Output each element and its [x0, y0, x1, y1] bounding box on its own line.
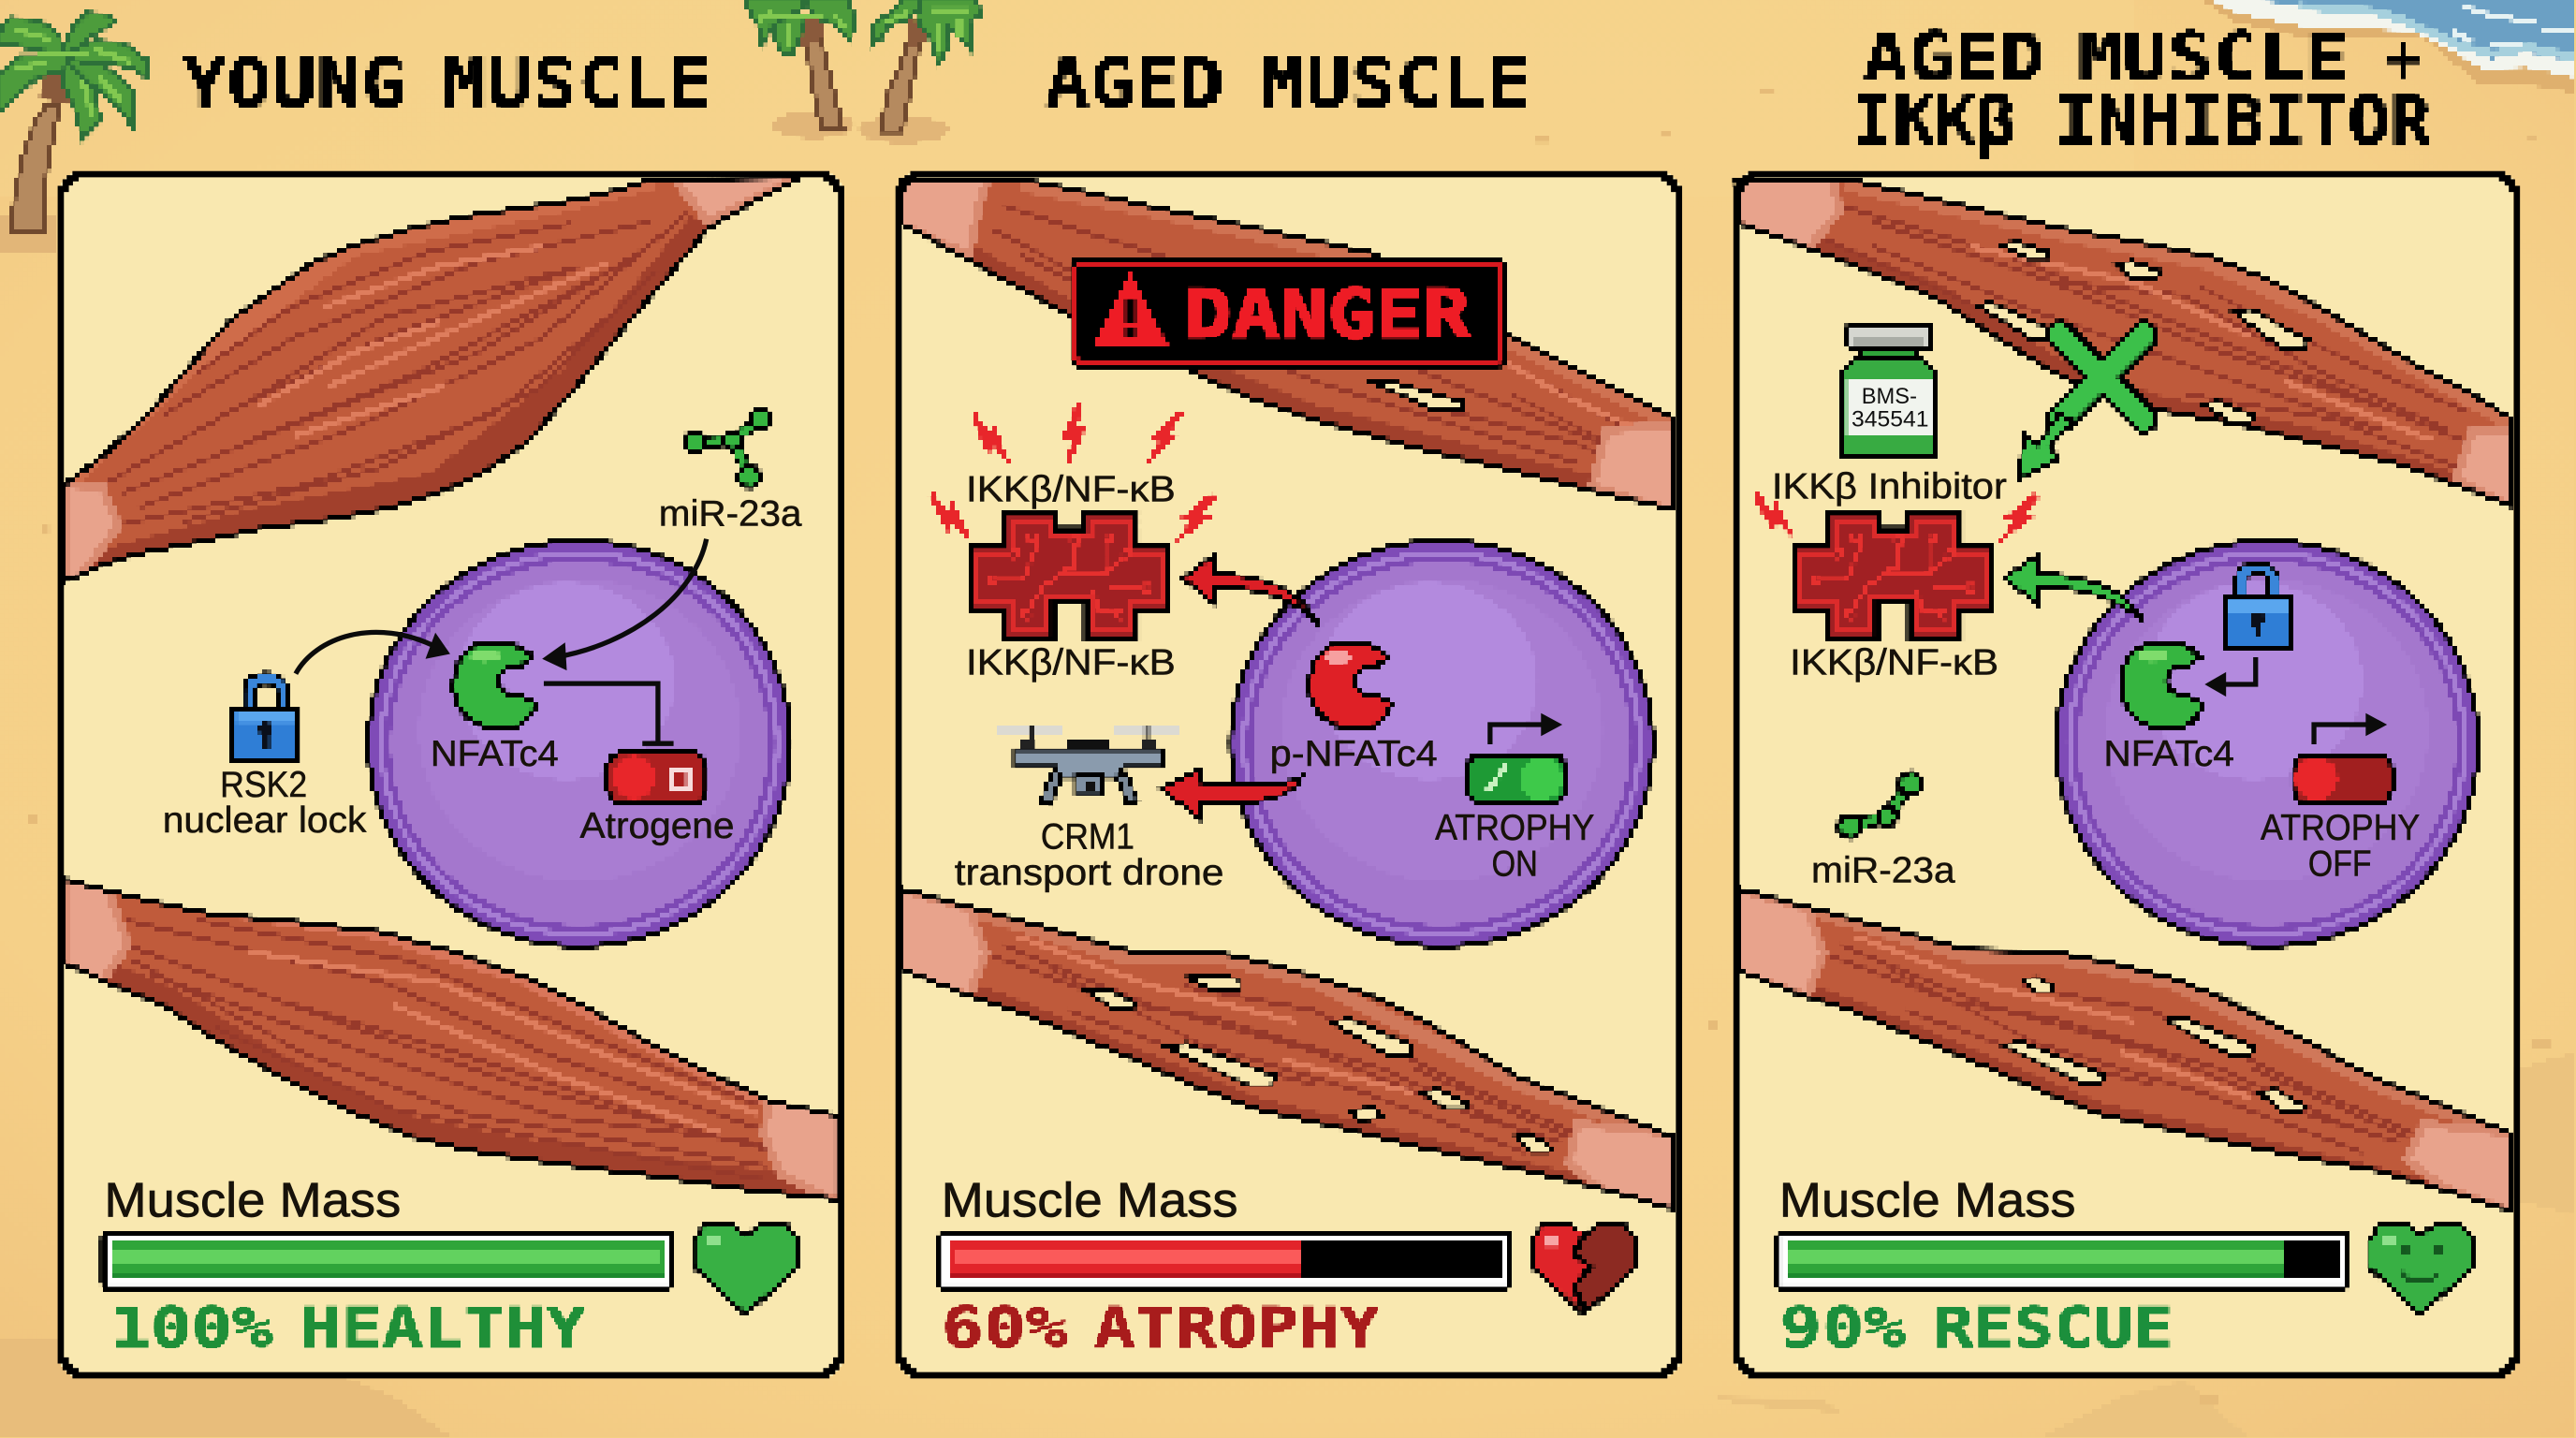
muscle: recovering lower fiber [1736, 889, 2515, 1212]
icon: green NFATc4 enzyme [2121, 642, 2203, 729]
arrow: lock to enzyme [2204, 657, 2256, 697]
arrow: transcription arrow above toggle [1490, 713, 1562, 744]
title: aged muscle + IKKβ inhibitor: AGED [1863, 18, 2044, 96]
label: NFATc4: NFATc4 [2103, 734, 2234, 774]
label: ATROPHY ON [1435, 808, 1594, 884]
label: ATROPHY OFF: ATROPHY [2261, 808, 2420, 848]
status: 60% atrophy: ATROPHY [1094, 1296, 1380, 1360]
panel border [61, 174, 842, 1375]
arrow: to kinase chip [1183, 553, 1319, 624]
arrow: inhibitor arrow [2019, 414, 2073, 479]
muscle: thin upper fiber [897, 174, 1677, 513]
title: young muscle: YOUNG [183, 44, 406, 123]
label: nuclear lock: nuclear lock [163, 800, 367, 841]
status bar: muscle mass 100% [103, 1232, 673, 1289]
label: bottle BMS-345541 [1852, 385, 1928, 432]
icon: miR-23a fragment [1838, 772, 1922, 838]
status: 100% healthy: HEALTHY [300, 1296, 587, 1360]
palm tree middle right [858, 0, 983, 144]
label: Atrogene: Atrogene [580, 806, 735, 846]
warning sign: danger [1070, 258, 1506, 368]
panel: young muscle [61, 44, 842, 1375]
icon: atrophy off toggle [2293, 755, 2392, 803]
label: miR-23a: miR-23a [659, 494, 802, 535]
icons: red lightning bolts [919, 404, 1216, 549]
icon: healthy heart [694, 1223, 798, 1314]
label: p-NFATc4: p-NFATc4 [1270, 734, 1438, 774]
label: ATROPHY OFF: OFF [2308, 844, 2371, 884]
muscle: healthy lower fiber [64, 875, 842, 1203]
title: aged muscle: AGED [1045, 44, 1224, 123]
arrow: to CRM1 drone [1162, 769, 1303, 818]
icon: CRM1 transport drone [996, 725, 1179, 805]
status bar: muscle mass 60% [939, 1232, 1511, 1289]
icon: active kinase chip [971, 514, 1168, 638]
water at top right [2202, 0, 2576, 94]
panel: aged muscle [897, 44, 1679, 1375]
panel: aged muscle with IKKβ inhibitor [1736, 18, 2517, 1375]
nucleus [2054, 538, 2481, 949]
label: muscle mass: Muscle Mass [942, 1173, 1237, 1227]
label: upper IKKβ/NF-κB: IKKβ/NF-κB [966, 469, 1176, 509]
label: bottle BMS-345541: 345541 [1852, 407, 1928, 432]
title: aged muscle + IKKβ inhibitor: MUSCLE [2077, 18, 2349, 96]
label: lower IKKβ/NF-κB: IKKβ/NF-κB [966, 642, 1176, 682]
label: RSK2: RSK2 [220, 765, 307, 805]
icon: kinase chip [1794, 514, 1992, 638]
inhibition line: enzyme blocks atrogene [544, 683, 674, 743]
icon: broken heart [1531, 1223, 1636, 1314]
arrow: miR-23a acts on enzyme [542, 539, 707, 670]
label: bottle BMS-345541: BMS- [1862, 385, 1917, 409]
label: transport drone: transport drone [955, 853, 1224, 893]
icon: smiling heart [2368, 1223, 2473, 1314]
label: muscle mass: Muscle Mass [104, 1173, 401, 1227]
title: aged muscle + IKKβ inhibitor: INHIBITOR [2056, 81, 2432, 160]
icon: BMS-345541 bottle [1843, 324, 1936, 457]
panel border [1736, 174, 2517, 1375]
title: aged muscle + IKKβ inhibitor: IKKβ [1852, 81, 2017, 160]
label: miR-23a: miR-23a [1811, 850, 1955, 890]
icon: miR-23a molecule [684, 408, 771, 487]
title: aged muscle: MUSCLE [1260, 44, 1531, 123]
nucleus [366, 538, 793, 949]
icon: atrophy on toggle [1467, 755, 1566, 803]
status: 60% atrophy: 60% [942, 1296, 1068, 1360]
arrow: lock acts on enzyme [296, 632, 450, 674]
text: danger: DANGER [1184, 275, 1471, 354]
label: ATROPHY OFF [2261, 808, 2420, 884]
status: 90% rescue: 90% [1780, 1296, 1906, 1360]
label: CRM1: CRM1 [1041, 817, 1134, 858]
icons: lightning bolts [1745, 488, 2040, 549]
icon: RSK2 lock [233, 679, 299, 759]
panel border [899, 174, 1679, 1375]
palm tree middle left [746, 0, 855, 139]
label: IKKβ Inhibitor: IKKβ Inhibitor [1772, 467, 2007, 507]
icon: nuclear lock [2224, 568, 2291, 649]
status bar: muscle mass 90% [1777, 1232, 2349, 1289]
nucleus [1228, 538, 1655, 949]
muscle: damaged lower fiber with holes [899, 889, 1677, 1212]
label: ATROPHY ON: ATROPHY [1435, 808, 1594, 848]
muscle: healthy upper fiber [64, 174, 805, 585]
arrow: transcription arrow above toggle [2314, 713, 2387, 744]
palm tree left [0, 13, 148, 252]
arrow: green arrow to kinase chip [2004, 553, 2145, 624]
icon: atrogene off toggle [607, 753, 707, 803]
title: young muscle: MUSCLE [442, 44, 713, 123]
status: 90% rescue: RESCUE [1934, 1296, 2174, 1360]
label: ATROPHY ON: ON [1492, 844, 1538, 884]
icon: green NFATc4 enzyme [453, 642, 535, 729]
icon: green X blocking damage [2060, 335, 2144, 419]
icon: red p-NFATc4 enzyme [1310, 642, 1392, 729]
label: IKKβ/NF-κB: IKKβ/NF-κB [1790, 642, 1998, 682]
label: NFATc4: NFATc4 [431, 734, 559, 774]
muscle: recovering upper fiber [1736, 178, 2515, 509]
title: aged muscle + IKKβ inhibitor: + [2385, 18, 2421, 96]
title: aged muscle + IKKβ inhibitor [1852, 18, 2432, 160]
status: 100% healthy: 100% [110, 1296, 272, 1360]
label: muscle mass: Muscle Mass [1779, 1173, 2076, 1227]
